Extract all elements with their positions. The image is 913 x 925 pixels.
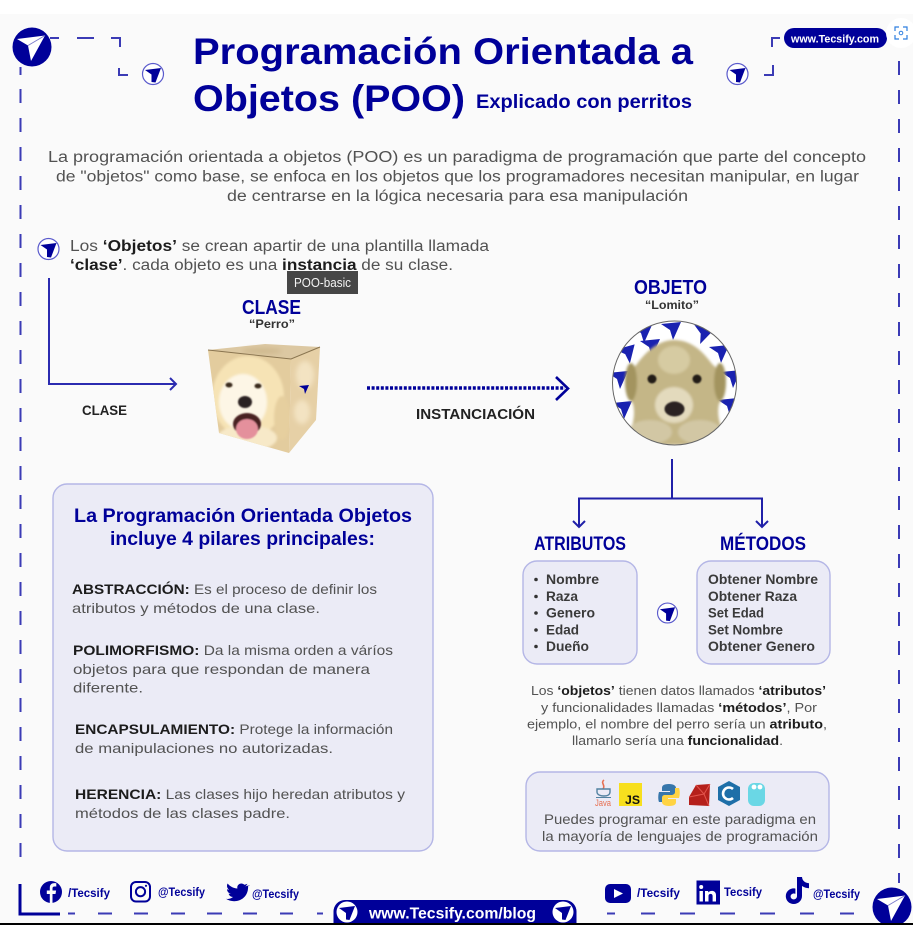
small logo title right (727, 64, 748, 84)
panel: metodos: Obtener Genero (708, 639, 815, 654)
pilar: polimorfismo: objetos para que respondan de manera (73, 661, 370, 677)
panel: metodos: Obtener Raza (708, 589, 797, 604)
panel: atributos: Nombre (546, 572, 600, 587)
icon: go gopher (748, 783, 765, 806)
social: youtube: /Tecsify (637, 886, 680, 900)
heading: objeto (634, 277, 707, 312)
languages caption: la mayoría de lenguajes de programación (542, 828, 818, 844)
heading: objeto: OBJETO (634, 277, 707, 299)
panel: atributos: Edad (546, 622, 579, 638)
bullet icon objetos (38, 238, 59, 260)
panel: atributos: Raza (546, 589, 578, 604)
cube with puppy (208, 344, 320, 453)
pilar: polimorfismo: diferente. (73, 680, 143, 696)
social: twitter: @Tecsify (252, 887, 299, 901)
heading: atributos: ATRIBUTOS (534, 534, 626, 555)
social: youtube (605, 884, 680, 903)
icon: javascript: JS (625, 793, 640, 807)
small logo title left (142, 64, 164, 84)
icon: java (595, 780, 611, 808)
bottom-left corner bracket (20, 884, 60, 914)
languages caption: Puedes programar en este paradigma en (544, 811, 816, 827)
panel: metodos (697, 561, 830, 664)
title: Programación Orientada a (193, 31, 693, 72)
social: tiktok (786, 877, 860, 904)
arrow: class (49, 278, 176, 390)
icon: ruby (689, 784, 710, 806)
icon: python (658, 784, 680, 806)
panel: pilares (53, 484, 433, 851)
pilar: herencia: métodos de las clases padre. (75, 805, 290, 821)
objects text block: ejemplo, el nombre del perro sería un atributo , (527, 716, 827, 732)
icon: java: Java (595, 798, 611, 808)
objects explanation (70, 238, 489, 274)
heading: clase: “Perro” (249, 317, 295, 331)
social: tiktok: @Tecsify (813, 887, 860, 901)
heading: clase: CLASE (242, 297, 301, 319)
panel: metodos: Obtener Nombre (708, 572, 818, 587)
objects text block (527, 683, 827, 748)
panel: metodos: Set Nombre (708, 622, 783, 638)
website badge (784, 28, 887, 48)
social: instagram: @Tecsify (158, 885, 205, 899)
icon: javascript (619, 783, 642, 807)
panel: metodos: Set Edad (708, 606, 764, 620)
intro paragraph: de centrarse en la lógica necesaria para esa manipulación (227, 188, 688, 205)
title: Objetos (POO) (193, 78, 465, 119)
pilar: encapsulamiento: ENCAPSULAMIENTO: Protege la información (75, 721, 393, 737)
objects explanation: ‘clase’ . cada objeto es una instancia de su clase. (70, 257, 453, 274)
website badge: www.Tecsify.com (790, 34, 879, 46)
pilar: encapsulamiento (75, 721, 393, 756)
pilar: encapsulamiento: de manipulaciones no autorizadas. (75, 740, 333, 756)
footer blog pill (334, 900, 576, 923)
small logo between panels (658, 603, 677, 623)
objects explanation: Los ‘Objetos’ se crean apartir de una plantilla llamada (70, 238, 489, 255)
objects text block: y funcionalidades llamadas ‘métodos’ , Por (541, 700, 818, 715)
panel heading (74, 506, 412, 550)
heading: metodos: MÉTODOS (720, 533, 806, 555)
icon: csharp (718, 781, 740, 806)
social: facebook (40, 881, 110, 903)
pilar: polimorfismo (73, 642, 393, 696)
pilar: herencia: HERENCIA: Las clases hijo heredan atributos y (75, 786, 405, 802)
title: Explicado con perritos (476, 91, 692, 113)
footer blog pill: www.Tecsify.com/blog (368, 906, 536, 922)
languages caption (542, 811, 818, 844)
social: instagram (131, 882, 205, 902)
pilar: herencia (75, 786, 405, 821)
dog photo circle (606, 321, 741, 445)
objects text block: Los ‘objetos’ tienen datos llamados ‘atributos’ (531, 683, 826, 698)
heading: clase (242, 297, 301, 331)
social: facebook: /Tecsify (68, 886, 110, 900)
panel: atributos: Dueño (546, 639, 589, 654)
social: linkedin (696, 880, 762, 904)
panel heading: incluye 4 pilares principales: (110, 529, 375, 550)
intro paragraph: La programación orientada a objetos (POO) es un paradigma de programación que parte del concepto (48, 149, 866, 166)
panel: atributos: Genero (546, 606, 595, 620)
social: twitter (226, 883, 299, 901)
title (193, 31, 693, 119)
screen capture button (886, 18, 913, 48)
intro paragraph: de "objetos" como base, se enfoca en los objetos que los programadores necesitan manipular, en lugar (56, 168, 859, 186)
objects text block: llamarlo sería una funcionalidad . (572, 733, 783, 748)
pilar: abstraccion: ABSTRACCIÓN: Es el proceso de definir los (72, 580, 377, 597)
tooltip (287, 271, 358, 294)
label: clase arrow: CLASE (82, 402, 127, 418)
pilar: abstraccion: atributos y métodos de una clase. (72, 600, 320, 616)
tree connector arrows (573, 459, 768, 527)
pilar: abstraccion (72, 580, 377, 616)
corner logo top-left (12, 28, 52, 66)
heading: objeto: “Lomito” (645, 298, 699, 312)
panel: atributos (523, 561, 637, 664)
panel: lenguajes (526, 772, 829, 851)
label: instanciacion: INSTANCIACIÓN (416, 405, 535, 423)
corner logo bottom-right (872, 888, 912, 925)
pilar: polimorfismo: POLIMORFISMO: Da la misma orden a váríos (73, 642, 393, 658)
social: linkedin: Tecsify (724, 885, 762, 899)
arrow: instanciation (367, 377, 568, 400)
panel heading: La Programación Orientada Objetos (74, 506, 412, 527)
tooltip: POO-basic (294, 275, 351, 290)
intro paragraph (48, 149, 866, 205)
